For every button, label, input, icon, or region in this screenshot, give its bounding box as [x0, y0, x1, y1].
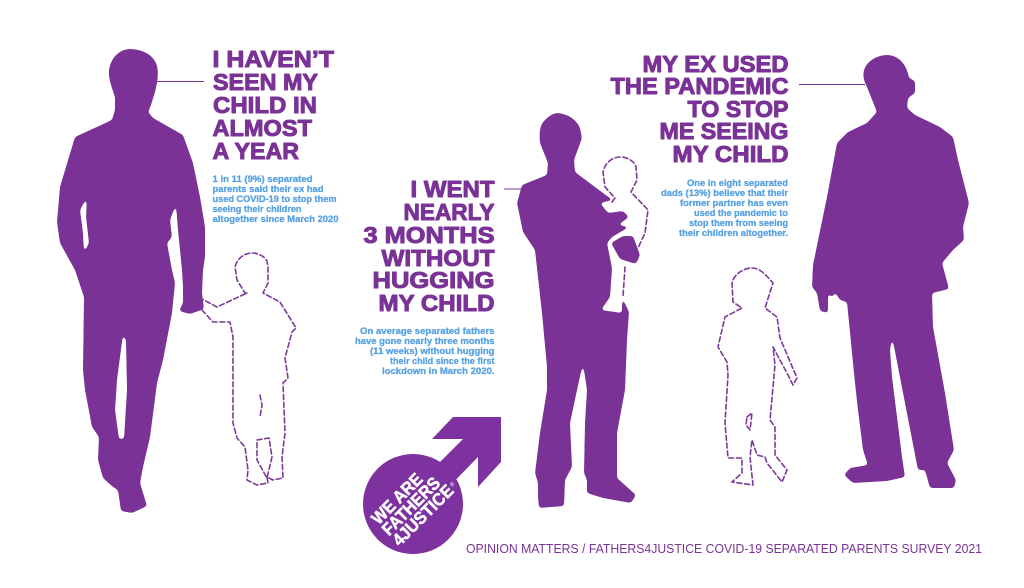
statistic text [212, 174, 338, 225]
statistic text: dads (13%) believe that their [661, 188, 788, 199]
logo wording: 4JUSTICE [388, 481, 457, 550]
heading: HUGGING [372, 267, 494, 293]
father silhouette, standing [812, 55, 969, 488]
statistic text: lockdown in March 2020. [382, 366, 494, 377]
statistic text: stop them from seeing [689, 218, 788, 229]
icon: arrow [420, 417, 501, 500]
statistic text: their children altogether. [679, 228, 788, 239]
dashed baby outline [603, 157, 648, 297]
dashed child outline [200, 253, 296, 485]
leader line [155, 80, 204, 82]
father silhouette, holding child [517, 113, 640, 508]
statistic text: used the pandemic to [694, 208, 788, 219]
heading: THE PANDEMIC [610, 73, 789, 99]
leader line [504, 188, 523, 190]
leader line [799, 84, 865, 86]
dashed child outline [718, 268, 797, 485]
statistic text: seeing their children [212, 204, 302, 215]
logo wording: WE ARE [367, 469, 427, 528]
statistic text: have gone nearly three months [355, 336, 494, 347]
panel: right father and child [610, 51, 969, 488]
statistic text: (11 weeks) without hugging [370, 346, 495, 357]
heading: CHILD IN [213, 92, 317, 118]
statistic text: One in eight separated [687, 178, 788, 189]
statistic text [661, 178, 788, 239]
statistic text: parents said their ex had [212, 184, 324, 195]
heading: MY EX USED [642, 51, 788, 77]
heading: SEEN MY [213, 69, 318, 95]
heading: I WENT [410, 176, 495, 202]
icon: circle [363, 454, 463, 554]
panel: left father and child [57, 46, 338, 513]
heading: ME SEEING [660, 118, 788, 144]
heading: TO STOP [688, 96, 788, 122]
father silhouette, walking [57, 49, 205, 513]
heading [610, 51, 789, 167]
heading: ALMOST [212, 115, 313, 141]
logo wording: FATHERS [378, 473, 444, 539]
statistic text [355, 326, 495, 377]
statistic text: used COVID-19 to stop them [212, 194, 336, 205]
statistic text: 1 in 11 (9%) separated [212, 174, 313, 185]
logo: male symbol with We Are Fathers 4 Justice [363, 417, 501, 554]
heading: 3 MONTHS [364, 222, 494, 248]
statistic text: former partner has even [680, 198, 788, 209]
heading: I HAVEN’T [212, 46, 335, 72]
footer source line: OPINION MATTERS / FATHERS4JUSTICE COVID-19 SEPARATED PARENTS SURVEY 2021 [466, 541, 982, 556]
statistic text: On average separated fathers [360, 326, 494, 337]
panel: centre father holding baby [355, 113, 648, 508]
heading: NEARLY [404, 199, 495, 225]
logo wording [367, 469, 457, 550]
heading [212, 46, 335, 164]
logo wording: ® [448, 480, 457, 489]
statistic text: altogether since March 2020 [212, 214, 338, 225]
heading: MY CHILD [672, 141, 788, 167]
statistic text: their child since the first [390, 356, 495, 367]
heading [364, 176, 495, 316]
heading: WITHOUT [382, 245, 495, 271]
heading: A YEAR [212, 138, 299, 164]
heading: MY CHILD [378, 290, 494, 316]
